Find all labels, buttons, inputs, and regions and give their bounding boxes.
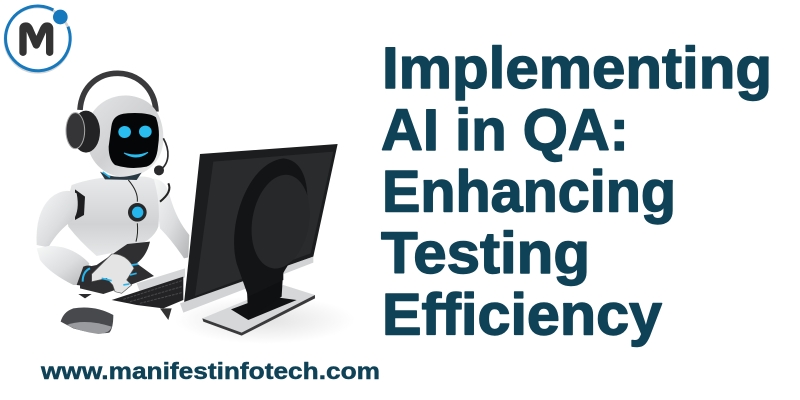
monitor frame [184,144,338,303]
website url: www.manifestinfotech.com [40,358,380,384]
robot body [36,172,189,298]
left shoulder [75,189,85,220]
title: Efficiency [382,282,662,348]
logo [5,6,70,72]
hand [92,254,134,293]
desk shadow [175,296,355,344]
dark waist [80,242,154,294]
robot head with headset [66,73,168,177]
title: Implementing [382,36,772,101]
torso [67,177,159,256]
left forearm [37,246,89,285]
title: Testing [381,221,590,286]
monitor back circle [234,158,307,297]
title: AI in QA: [381,98,629,163]
mouse [61,307,113,334]
monitor [180,144,338,336]
keyboard [112,268,185,320]
monitor stand [202,268,315,336]
left upper arm [36,191,78,247]
right arm [153,178,189,258]
title: Enhancing [382,160,676,224]
title [381,36,772,348]
